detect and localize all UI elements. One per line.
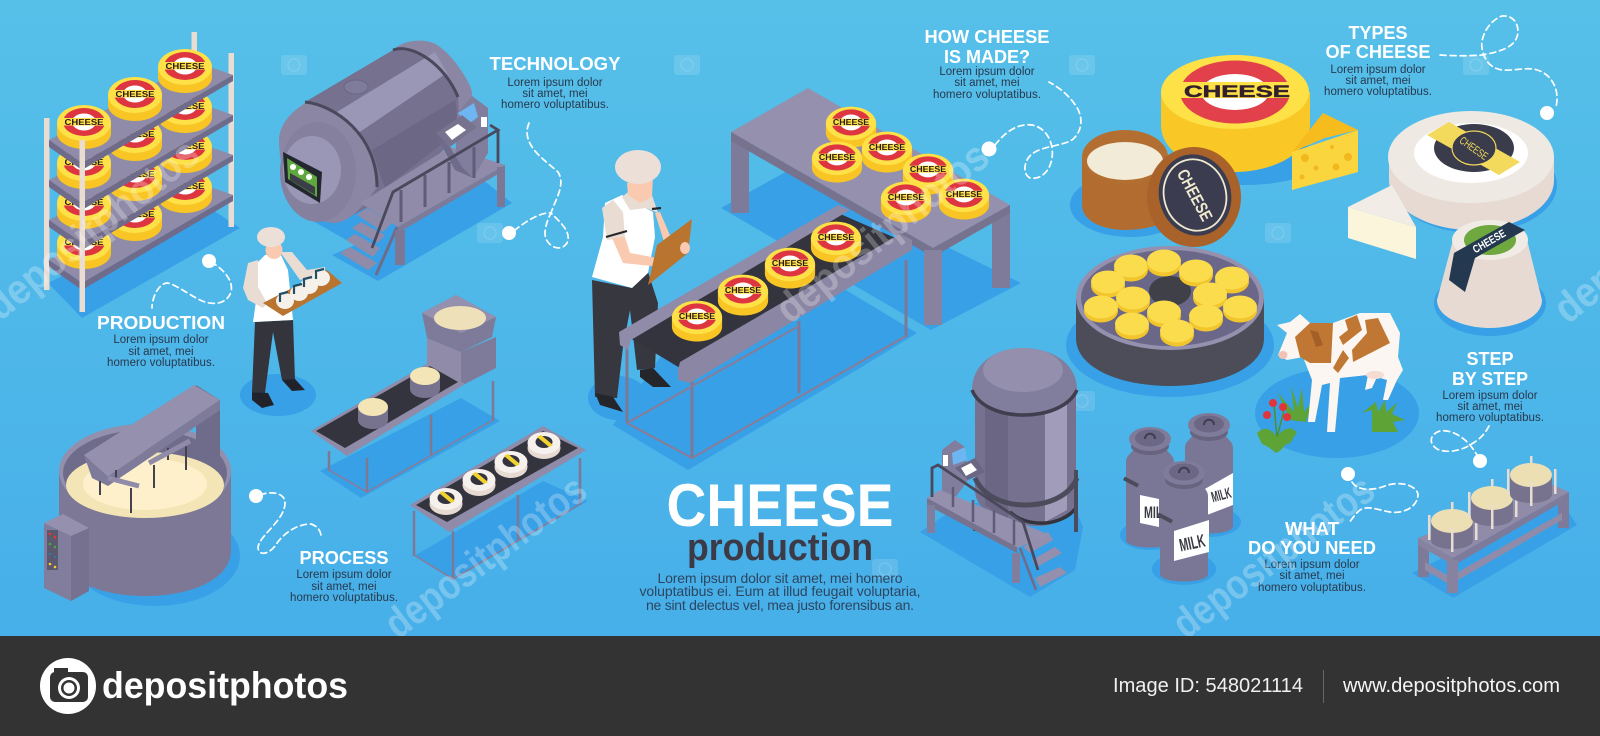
platform (360, 147, 505, 227)
second shelf: CHEESE (166, 101, 205, 111)
heading: step by step: BY STEP (1452, 369, 1528, 389)
bottom shelf (49, 169, 233, 290)
illustration: table with cheese: CHEESE (946, 190, 982, 199)
stairs (1023, 532, 1067, 587)
title: cheese production: Lorem ipsum dolor sit amet, mei homero (658, 570, 903, 586)
third shelf (49, 129, 233, 250)
handrail (401, 147, 474, 222)
watermarks (0, 129, 1600, 647)
bottom shelf: CHEESE (64, 237, 104, 247)
illustration: white cheese conveyor (410, 426, 588, 580)
side control box (942, 440, 968, 505)
front end cap (279, 102, 377, 223)
heading: technology: Lorem ipsum dolor (507, 77, 603, 89)
heading: how cheese is made (924, 27, 1050, 101)
heading: types of cheese: OF CHEESE (1326, 42, 1430, 62)
bottom shelf: CHEESE (116, 209, 155, 219)
illustration: cheese conveyor (619, 205, 912, 459)
second shelf (49, 89, 233, 210)
heading: types of cheese: sit amet, mei (1345, 75, 1411, 87)
watermarks: depositphotos (1163, 465, 1383, 647)
heading: types of cheese: homero voluptatibus. (1324, 86, 1432, 98)
illustration: small round cheese with band (1434, 220, 1546, 336)
heading: production: sit amet, mei (128, 346, 194, 358)
tank body (305, 50, 460, 222)
illustration: big yellow cheese and wedge (1161, 55, 1358, 190)
heading: process: homero voluptatibus. (290, 592, 398, 604)
connector: technology (502, 123, 568, 248)
connector: process (249, 489, 321, 553)
watermarks: depositphotos (375, 465, 595, 647)
heading: technology: TECHNOLOGY (490, 54, 620, 74)
grass left (1278, 386, 1312, 422)
second shelf: CHEESE (64, 157, 104, 167)
heading: how cheese is made: sit amet, mei (954, 77, 1020, 89)
heading: process: PROCESS (300, 548, 388, 568)
heading: what do you need: homero voluptatibus. (1258, 582, 1366, 594)
wedge (1348, 185, 1416, 227)
heading: types of cheese (1324, 23, 1432, 98)
heading: production: PRODUCTION (97, 313, 225, 333)
heading: how cheese is made: homero voluptatibus. (933, 89, 1041, 101)
heading: what do you need: WHAT (1285, 519, 1339, 539)
third shelf: CHEESE (64, 197, 104, 207)
second shelf: CHEESE (116, 129, 155, 139)
top shelf (49, 49, 233, 170)
footer bar (0, 636, 1600, 736)
illustration: table with cheese: CHEESE (833, 118, 869, 127)
heading: how cheese is made: IS MADE? (944, 47, 1030, 67)
illustration: cream wheel and wedge (1348, 111, 1557, 259)
heading: step by step: homero voluptatibus. (1436, 412, 1544, 424)
illustration: brown tub and lid: CHEESE (1173, 166, 1216, 224)
heading: step by step: sit amet, mei (1457, 401, 1523, 413)
illustration: conveyor shadow (613, 290, 917, 470)
title: cheese production (640, 472, 920, 613)
back dome (393, 41, 472, 130)
watermark camera icons (84, 55, 1489, 579)
illustration: cheese molds bench (1412, 456, 1577, 598)
connector: step by step (1431, 426, 1489, 468)
heading: process (290, 548, 398, 604)
heading: step by step: Lorem ipsum dolor (1442, 390, 1538, 402)
heading: production: homero voluptatibus. (107, 357, 215, 369)
heading: what do you need (1248, 519, 1376, 594)
illustration: cow (1255, 313, 1419, 458)
illustration: table with cheese: CHEESE (869, 143, 905, 152)
illustration: cheese conveyor: CHEESE (772, 259, 808, 268)
title: cheese production: CHEESE (666, 472, 894, 539)
image id: Image ID: 548021114 (1113, 675, 1303, 697)
stairs (340, 208, 392, 270)
top shelf: CHEESE (64, 117, 104, 127)
heading: step by step (1436, 349, 1544, 424)
heading: technology (490, 54, 620, 111)
control box (44, 523, 71, 601)
title: cheese production: voluptatibus ei. Eum at illud feugait voluptaria, (640, 583, 920, 599)
illustration: table shadow (721, 170, 1021, 330)
illustration: table with cheese (731, 88, 1010, 325)
illustration: milk cans: MILK (1144, 503, 1170, 522)
title: cheese production: ne sint delectus vel, mea justo forensibus an. (646, 597, 914, 613)
heading: how cheese is made: HOW CHEESE (924, 27, 1050, 47)
illustration: cheese conveyor: CHEESE (725, 286, 761, 295)
site url: www.depositphotos.com (1342, 675, 1560, 697)
title: cheese production: production (687, 527, 873, 569)
illustration: big yellow cheese and wedge: CHEESE (1184, 82, 1290, 101)
illustration: cheese conveyor: CHEESE (818, 233, 854, 242)
heading: process: sit amet, mei (311, 581, 377, 593)
heading: step by step: STEP (1466, 349, 1514, 369)
body (1277, 313, 1403, 432)
top shelf: CHEESE (166, 61, 205, 71)
mixer arm (196, 385, 220, 470)
icon: camera logo (40, 658, 96, 714)
grass right (1362, 400, 1405, 432)
illustration: cheese conveyor: CHEESE (679, 312, 715, 321)
heading: production (97, 313, 225, 369)
illustration: cheese tray (1066, 246, 1274, 397)
flowers (1257, 399, 1297, 453)
heading: technology: sit amet, mei (522, 88, 588, 100)
heading: what do you need: DO YOU NEED (1248, 538, 1376, 558)
heading: types of cheese: Lorem ipsum dolor (1330, 64, 1426, 76)
connector: production (152, 254, 231, 308)
heading: process: Lorem ipsum dolor (296, 569, 392, 581)
third shelf: CHEESE (116, 169, 155, 179)
heading: how cheese is made: Lorem ipsum dolor (939, 66, 1035, 78)
illustration: milk cans (1120, 413, 1241, 585)
heading: what do you need: Lorem ipsum dolor (1264, 559, 1360, 571)
illustration: brown tub and lid (1070, 130, 1241, 247)
illustration: cheese rack (44, 32, 240, 318)
control box (455, 96, 488, 178)
illustration: milk cans: MILK (1210, 485, 1233, 506)
logo wordmark: depositphotos (102, 665, 348, 706)
connector: what do you need (1341, 467, 1418, 523)
connector: types of cheese (1440, 16, 1557, 120)
third shelf: CHEESE (166, 141, 205, 151)
illustration: horizontal tank on platform (279, 41, 512, 281)
illustration: milk cans: MILK (1177, 530, 1207, 555)
illustration: table with cheese: CHEESE (819, 153, 855, 162)
bottom shelf: CHEESE (166, 181, 205, 191)
illustration: table with cheese: CHEESE (910, 165, 946, 174)
illustration: table with cheese: CHEESE (888, 193, 924, 202)
watermarks: depositphotos (766, 132, 998, 332)
heading: production: Lorem ipsum dolor (113, 334, 209, 346)
deck (927, 490, 1050, 548)
illustration: hopper conveyor (311, 295, 500, 498)
control window (283, 152, 322, 203)
heading: what do you need: sit amet, mei (1279, 570, 1345, 582)
top shelf: CHEESE (116, 89, 155, 99)
illustration: vertical tank (920, 348, 1083, 597)
illustration: mixing vat (44, 385, 240, 606)
illustration: cream wheel and wedge: CHEESE (1457, 135, 1490, 163)
illustration: quality inspector (588, 150, 692, 420)
heading: technology: homero voluptatibus. (501, 99, 609, 111)
illustration: worker with tray (240, 227, 342, 416)
connector: how cheese is made (982, 82, 1081, 178)
illustration: small round cheese with band: CHEESE (1471, 228, 1508, 256)
heading: types of cheese: TYPES (1348, 23, 1408, 43)
wedge (1292, 113, 1358, 152)
